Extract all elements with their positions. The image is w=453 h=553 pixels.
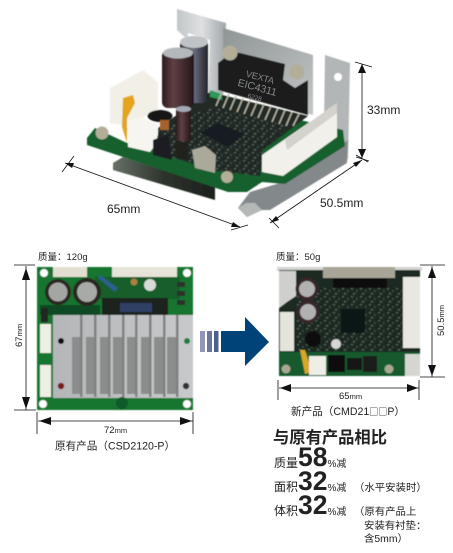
pcb (37, 267, 193, 410)
dimension: 72mm: 72mm (104, 425, 127, 436)
new product board photo (277, 267, 422, 376)
corner holes (39, 269, 191, 408)
arrow: old to new (200, 317, 269, 366)
heat sink with fins (53, 315, 193, 398)
comparison row: volume: 32 (298, 490, 328, 520)
comparison heading: 与原有产品相比 (273, 429, 387, 447)
lower right metal (405, 354, 420, 376)
large capacitors (162, 36, 208, 108)
QFP chip (200, 123, 245, 147)
dimension: 33mm (355, 62, 400, 161)
board speckle (296, 288, 404, 352)
inductor (305, 331, 321, 347)
small capacitor (176, 106, 191, 141)
dimension: 67mm: 67mm (14, 324, 25, 347)
comparison row: volume: %减 (328, 506, 346, 518)
comparison row: area: 32 (298, 466, 328, 496)
microcontroller (341, 309, 365, 333)
top connector (323, 267, 395, 278)
upper circuit shading (95, 277, 180, 299)
connector shading (285, 103, 337, 150)
metal bracket: back plate (223, 28, 313, 115)
chip marking: VEXTA (245, 69, 275, 86)
new product caption: 新产品（CMD21□□P） (291, 405, 405, 418)
dark band below capacitors (40, 305, 100, 315)
regulator chip: VEXTA (218, 52, 308, 115)
capacitors (296, 278, 318, 300)
dimension: 50.5mm: 50.5mm (320, 196, 363, 210)
metal bracket: rear flange (177, 9, 226, 100)
white connector: front (127, 117, 158, 152)
white connector: right (262, 103, 337, 176)
small silver capacitor (331, 339, 341, 349)
dark pcb (279, 270, 420, 376)
volume note line 2: 安装有衬垫： (364, 519, 426, 532)
dimension: 50.5mm (269, 155, 368, 228)
small trimmer (175, 140, 188, 160)
bottom heat plate (113, 157, 215, 200)
metal bracket: right flange (324, 55, 350, 160)
blue component (98, 275, 118, 292)
metal bracket: base tab (238, 203, 262, 217)
capacitors (45, 279, 71, 305)
inductor coil (160, 120, 169, 130)
bottom round part (116, 397, 128, 409)
chip marking: EIC4311 (236, 77, 278, 99)
old product caption: 原有产品（CSD2120-P） (55, 440, 175, 452)
dimension: 33mm: 33mm (367, 103, 400, 117)
metal strip behind board (277, 267, 422, 271)
inductor (148, 110, 172, 122)
yellow tab (300, 350, 312, 374)
orange part (130, 278, 138, 286)
flange notch (334, 73, 342, 81)
dimension: 65mm: 65mm (107, 202, 140, 216)
dimension: 65mm (62, 156, 248, 230)
blue IC in dark area (120, 303, 152, 312)
SMD parts (177, 282, 185, 305)
pin field (216, 92, 299, 126)
yellow tab (122, 95, 135, 143)
round component (144, 279, 156, 291)
dimension: 72mm (37, 412, 193, 436)
connector base (333, 278, 387, 288)
right weight label: 质量：50g (276, 251, 320, 263)
comparison row: weight: 58 (298, 442, 328, 472)
board speckle (158, 107, 290, 176)
chip marking: 6228 (247, 93, 263, 103)
volume note line 3: 含5mm） (364, 532, 408, 545)
top connectors (53, 267, 87, 277)
dimension: 50.5mm vertical (420, 265, 447, 377)
green stub under regulator (210, 90, 222, 100)
comparison row: weight: %减 (328, 458, 346, 470)
bottom green edge (279, 352, 420, 376)
top photo: 3D view of CMD21 driver board (87, 9, 350, 217)
screws (96, 46, 304, 183)
dimension: 65mm horizontal: 65mm (339, 391, 362, 402)
comparison row: volume: （原有产品上 (354, 505, 416, 518)
comparison row: volume: 体积 (274, 504, 298, 518)
populated board area (158, 92, 308, 176)
dark circuit area (102, 298, 168, 315)
metal bracket: base (238, 140, 348, 217)
comparison row: weight: 质量 (274, 456, 298, 470)
DIP switch (153, 134, 172, 160)
comparison row: area: 面积 (274, 480, 298, 494)
chip marking (234, 67, 281, 107)
old product board photo (37, 267, 193, 410)
rotary switch (192, 146, 216, 173)
dimension: 65mm horizontal (278, 380, 419, 402)
white connector: left (110, 70, 158, 127)
white connector (309, 356, 326, 375)
left white connectors (40, 324, 51, 353)
pcb (87, 106, 345, 192)
screws (282, 364, 290, 374)
comparison row: area: %减 (328, 482, 346, 494)
left side metal (279, 271, 296, 308)
dimension: 67mm (14, 265, 36, 410)
dimension: 50.5mm vertical: 50.5mm (436, 305, 447, 336)
black parts (328, 355, 345, 372)
left weight label: 质量：120g (38, 251, 88, 263)
comparison row: area: （水平安装时） (354, 481, 427, 494)
side connectors (403, 277, 420, 348)
